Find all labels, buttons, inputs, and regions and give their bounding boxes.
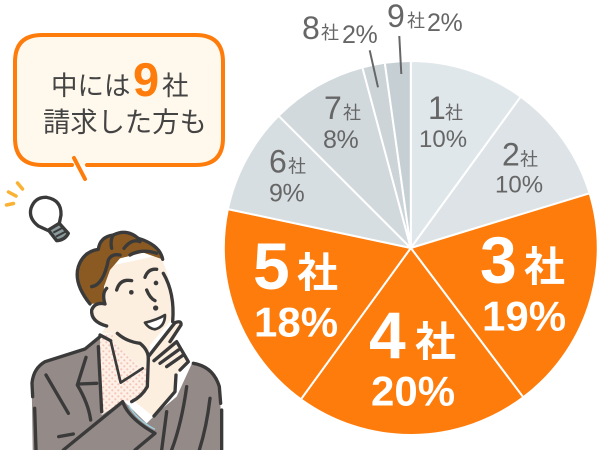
label: 6社 9%: 6 — [269, 144, 287, 180]
mouth — [145, 315, 165, 329]
slice: 6社 — [228, 116, 411, 248]
label: 9社 2%: 社 — [407, 11, 425, 31]
eyes and nose — [129, 281, 158, 311]
suit — [32, 337, 222, 450]
suit outlines — [32, 335, 222, 450]
label: 5社 18%: 5 — [253, 229, 290, 303]
label: 5社 18%: 社 — [297, 250, 338, 296]
hair and head outline — [77, 232, 173, 358]
bubble text: 9 — [133, 53, 159, 106]
label: 1社 10% — [419, 90, 467, 153]
leader line: 9社 — [399, 36, 401, 74]
slice: 4社 — [301, 248, 523, 435]
label: 5社 18% — [253, 229, 338, 346]
label: 3社 19%: 19% — [482, 292, 566, 340]
label: 8社 2% — [302, 10, 378, 49]
bubble body — [15, 35, 223, 165]
shirt — [100, 333, 147, 415]
bubble tail — [74, 158, 85, 179]
label: 4社 20%: 社 — [415, 319, 456, 365]
bubble text: 請求した方も — [43, 106, 207, 138]
pie chart — [224, 61, 598, 435]
label: 9社 2%: 2% — [427, 9, 463, 37]
bubble text: 中には — [51, 71, 130, 101]
slice: 1社 — [411, 61, 521, 248]
icon: sparks — [6, 183, 22, 205]
bubble text: 社 — [162, 71, 188, 101]
label: 8社 2%: 8 — [302, 10, 320, 46]
label: 4社 20% — [369, 298, 456, 414]
label: 7社 8%: 社 — [343, 103, 361, 123]
label: 4社 20%: 4 — [369, 298, 406, 372]
label: 9社 2% — [387, 0, 463, 37]
hand outline — [132, 322, 188, 416]
slice: 8社 — [362, 63, 411, 248]
label: 2社 10% — [495, 136, 543, 198]
bubble text — [43, 53, 207, 138]
hand — [135, 322, 188, 417]
slice: 5社 — [224, 209, 411, 399]
label: 1社 10%: 1 — [428, 90, 446, 126]
label: 4社 20%: 20% — [371, 368, 455, 414]
label: 6社 9% — [269, 144, 306, 208]
speech bubble — [15, 35, 223, 179]
label: 2社 10%: 2 — [502, 136, 520, 172]
label: 7社 8%: 7 — [324, 90, 342, 126]
label: 8社 2%: 社 — [321, 23, 339, 43]
label: 6社 9%: 社 — [288, 156, 306, 176]
label: 7社 8%: 8% — [323, 126, 359, 154]
label: 3社 19%: 社 — [524, 244, 565, 290]
label: 5社 18%: 18% — [254, 298, 338, 346]
label: 3社 19% — [480, 223, 566, 340]
label: 2社 10%: 10% — [495, 172, 543, 198]
slice: 2社 — [411, 97, 590, 248]
shirt cuff — [128, 405, 155, 429]
face and neck — [91, 255, 174, 368]
slice: 7社 — [279, 67, 411, 248]
illustration: thinking man — [32, 232, 222, 450]
slice: 3社 — [411, 193, 598, 397]
label: 3社 19%: 3 — [480, 223, 517, 297]
slice: 9社 — [385, 61, 411, 248]
label: 8社 2%: 2% — [342, 21, 378, 49]
leader line: 8社 — [370, 50, 378, 87]
label: 1社 10%: 社 — [445, 103, 463, 123]
label: 6社 9%: 9% — [269, 180, 305, 208]
hair — [77, 232, 163, 304]
label: 7社 8% — [323, 90, 361, 154]
label: 2社 10%: 社 — [520, 150, 538, 170]
icon: light bulb — [30, 197, 68, 241]
label: 1社 10%: 10% — [419, 126, 467, 153]
